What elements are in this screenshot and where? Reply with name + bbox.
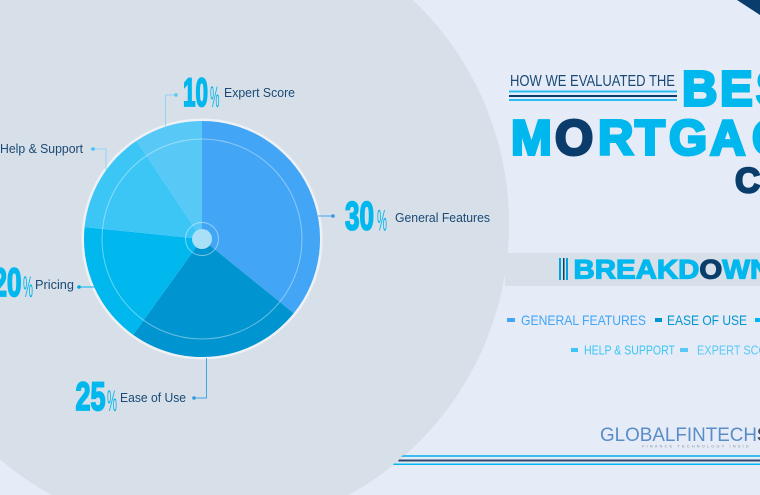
callout: expert score: [166, 71, 295, 126]
heading: mortgage: M: [511, 112, 552, 166]
callout: ease of use: %: [107, 385, 117, 418]
logo: globalfintech: GLOBALFINTECH: [600, 425, 757, 446]
heading: best: E: [720, 62, 753, 116]
corner triangle: [737, 0, 760, 15]
slice: general features: [202, 121, 320, 313]
heading: mortgage: G: [669, 112, 707, 166]
banner stripes: [559, 258, 568, 280]
callout: general features: 30: [345, 194, 374, 238]
callout: pricing: Pricing: [35, 278, 74, 292]
footer stripes: [393, 455, 760, 465]
callout: pricing: [0, 261, 95, 305]
heading: how we evaluated the: HOW WE EVALUATED THE: [510, 73, 675, 90]
legend: ease of use: EASE OF USE: [667, 312, 747, 328]
callout: pricing: %: [23, 271, 33, 304]
slice: pricing: [84, 227, 202, 335]
callout: general features: General Features: [395, 211, 490, 225]
heading: mortgage: A: [710, 112, 745, 166]
callout: expert score: %: [210, 81, 220, 114]
callout: help and support: Help & Support: [0, 142, 84, 156]
legend: help and support: HELP & SUPPORT: [584, 342, 675, 358]
callout: expert score: 10: [183, 71, 208, 115]
heading underline stripes: [509, 90, 677, 101]
heading: best: B: [682, 62, 717, 116]
slice: expert score: [136, 121, 202, 239]
logo: globalfintech: FINANCE TECHNOLOGY INSID: [642, 444, 751, 448]
heading: mortgage: T: [635, 112, 665, 166]
heading: c: C: [735, 162, 760, 200]
heading: mortgage: R: [598, 112, 633, 166]
callout: general features: %: [377, 204, 387, 238]
heading: mortgage: O: [555, 112, 593, 166]
background circle: [0, 0, 509, 495]
pie chart: [82, 118, 322, 360]
callout: ease of use: 25: [76, 375, 106, 419]
callout: general features: [318, 194, 490, 238]
slice: ease of use: [133, 239, 294, 357]
legend: general features: GENERAL FEATURES: [521, 312, 646, 328]
breakdown banner: [505, 253, 760, 286]
callout: help and support: [0, 142, 106, 170]
callout: ease of use: Ease of Use: [120, 391, 186, 405]
callout: expert score: Expert Score: [224, 86, 295, 100]
pie center dot: [192, 229, 212, 249]
legend: pricing marker: [755, 318, 760, 322]
slice: help and support: [85, 141, 202, 239]
callout: ease of use: [76, 358, 206, 419]
